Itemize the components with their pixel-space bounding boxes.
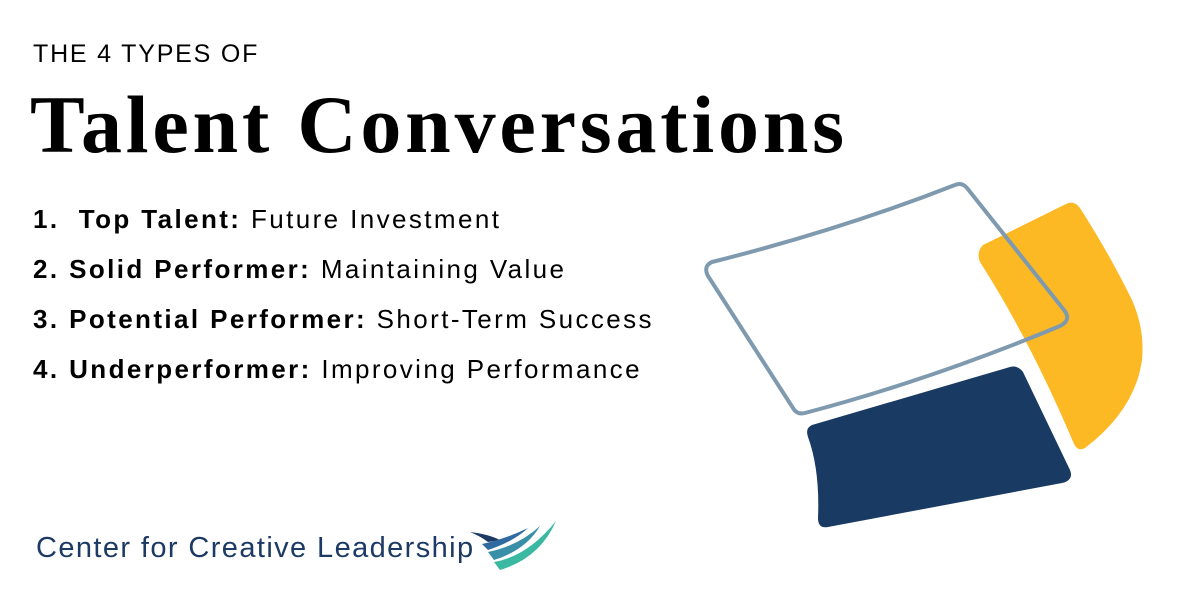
subtitle: THE 4 TYPES OF [33, 40, 259, 68]
item 2: 2. Solid Performer: Maintaining Value [33, 254, 566, 284]
title: Talent Conversations [30, 79, 848, 170]
logo icon [470, 521, 556, 570]
yellow shape [979, 203, 1143, 449]
item 3: 3. Potential Performer: Short-Term Success [33, 304, 654, 334]
logo [36, 521, 556, 570]
item 1: 1. Top Talent: Future Investment [33, 204, 501, 234]
outline shape [706, 184, 1067, 413]
navy shape [807, 367, 1071, 527]
logo text: Center for Creative Leadership [36, 532, 475, 564]
item 4: 4. Underperformer: Improving Performance [33, 354, 642, 384]
list of types [33, 204, 654, 384]
